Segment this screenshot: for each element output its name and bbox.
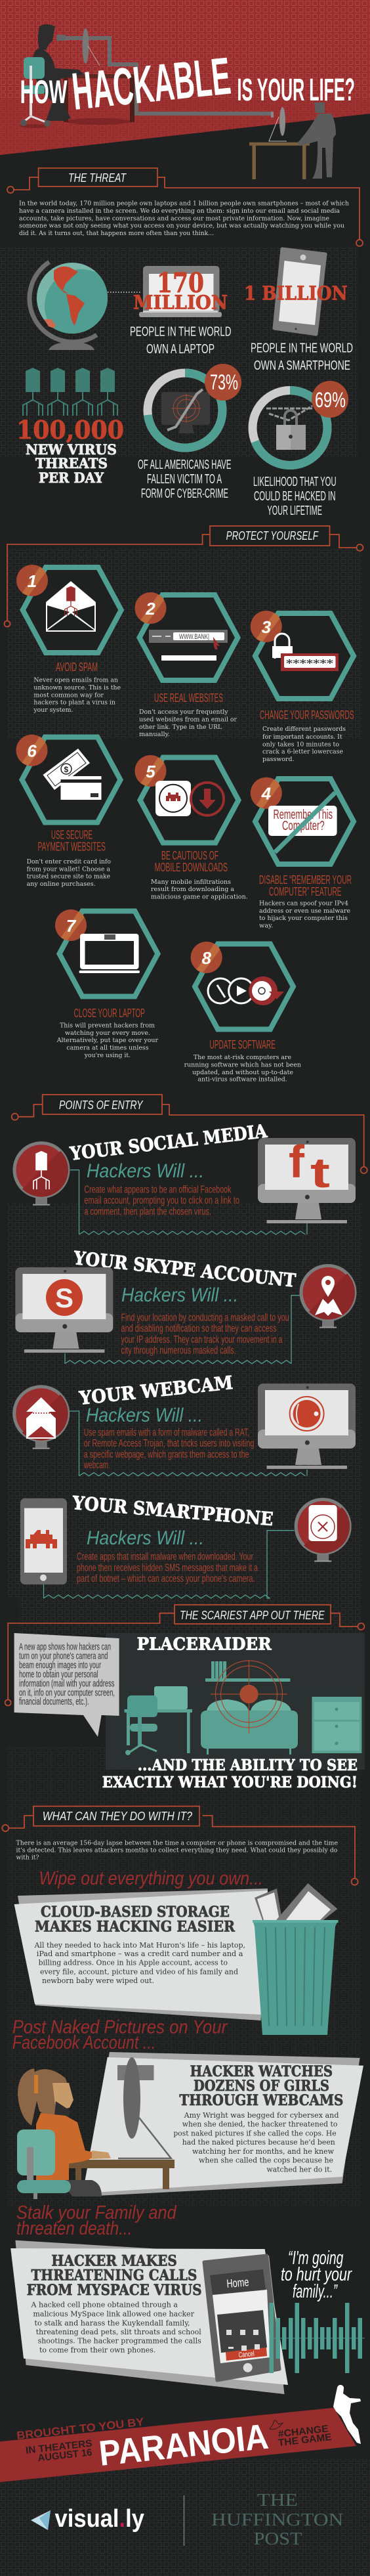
victim figure xyxy=(297,102,336,179)
tip 8: update software: running software which has not been xyxy=(184,1062,301,1069)
tip 5: mobile downloads: MOBILE DOWNLOADS xyxy=(155,861,228,874)
crosshair target xyxy=(211,1660,287,1734)
banner: brought to you by paranoia xyxy=(0,2385,361,2482)
hacker figure xyxy=(31,24,84,121)
hacker chair xyxy=(20,57,51,128)
section heading: points of entry: POINTS OF ENTRY xyxy=(59,1099,144,1112)
icon: location pin circle xyxy=(301,1266,355,1328)
panel: hacker watches dozens of girls: HACKER WATCHES xyxy=(190,2063,333,2080)
stat: 170 million xyxy=(133,267,228,314)
panel: cloud-based storage: MAKES HACKING EASIER xyxy=(35,1919,236,1936)
tip 7: close your laptop: 7 xyxy=(66,916,77,936)
section heading: what can they do with it: WHAT CAN THEY DO WITH IT? xyxy=(43,1810,192,1823)
section heading: protect yourself: PROTECT YOURSELF xyxy=(226,529,319,542)
tip 6: secure payment websites: USE SECURE xyxy=(51,829,92,842)
tip 1: avoid spam: 1 xyxy=(28,571,37,591)
entry: your skype account: your IP address. They can track your movement in a xyxy=(121,1334,283,1345)
heading: stalk your family: threaten death... xyxy=(16,2218,132,2239)
entry: your smartphone: part of botnet – which can access your phone's camera. xyxy=(77,1573,255,1584)
heading: post naked pictures: Facebook Account ... xyxy=(12,2032,155,2053)
entry: your social media: a comment, then plant the chosen virus. xyxy=(84,1206,211,1217)
tip 3: change your passwords xyxy=(251,611,354,763)
icon: phone call screen: Cancel xyxy=(238,2350,255,2359)
panel: hacker makes threatening calls: FROM MYSPACE VIRUS xyxy=(27,2282,202,2299)
tip 7: close your laptop xyxy=(55,909,158,1059)
entry: your skype account: city through numerous masked calls. xyxy=(121,1345,236,1357)
icon: virus envelope circle xyxy=(14,1387,68,1449)
banner: brought to you by paranoia: IN THEATERS xyxy=(25,2438,92,2456)
panel: hacker makes threatening calls xyxy=(10,2240,288,2394)
entry: your webcam: Use spam emails with a form of malware called a RAT, xyxy=(84,1428,249,1439)
title: HOW xyxy=(20,74,68,110)
bookshelf xyxy=(205,1661,290,1682)
tip 4: disable remember your computer: to hijack your computer this xyxy=(259,915,348,922)
entry: your webcam: YOUR WEBCAM xyxy=(77,1372,234,1409)
tip 1: avoid spam: hackers to plant a virus in xyxy=(33,699,115,707)
chart: 69% donut xyxy=(253,381,348,465)
entry: your skype account: Hackers Will ... xyxy=(121,1284,238,1306)
icon: tools play and update circles xyxy=(208,976,284,1005)
stat: 100,000 new virus threats: NEW VIRUS xyxy=(26,441,117,458)
section heading: the threat xyxy=(7,168,363,246)
callout: speech bubble about new app: turn on your phone's camera and xyxy=(19,1651,108,1662)
chart: 73% donut: 73% xyxy=(210,370,238,394)
desk and chair xyxy=(125,1686,192,1755)
heading: and the ability to see xyxy=(102,1757,358,1791)
intro text: accounts, take pictures, have conversations and access our most private information. Now, imagine xyxy=(19,215,329,222)
icon: monitor with skype logo: S xyxy=(55,1282,73,1313)
section heading: the scariest app out there: THE SCARIEST APP OUT THERE xyxy=(180,1609,325,1622)
tip 1: avoid spam xyxy=(16,565,121,714)
tip 5: mobile downloads: malicious game or application. xyxy=(151,894,248,901)
label: people own a smartphone xyxy=(251,341,353,373)
tip 2: use real websites: Don't access your frequently xyxy=(139,709,228,716)
panel: hacker makes threatening calls: to stalk and harass the Kuykendall family, xyxy=(34,2319,190,2327)
intro text: what can they do: There is an average 156-day lapse between the time a computer or phone is compromised and the time xyxy=(16,1839,338,1846)
intro text: what can they do: with it? xyxy=(16,1854,39,1862)
panel: cloud-based storage: billing address. Once in his Apple account, access to xyxy=(39,1959,228,1967)
icon: remember this computer box: Computer? xyxy=(282,819,325,833)
panel: hacker makes threatening calls: threatening dead pets, slit throats and school xyxy=(36,2328,201,2336)
panel: hacker watches dozens of girls: when she called the cops because he xyxy=(199,2156,333,2164)
tip 6: secure payment websites: 6 xyxy=(27,741,37,761)
icon: laptop with taped camera xyxy=(79,934,140,973)
panel: hacker makes threatening calls: HACKER MAKES xyxy=(51,2253,177,2270)
callout: speech bubble about new app: on it, info on your computer screen, xyxy=(19,1687,115,1698)
icon: phone with space invader xyxy=(20,1498,67,1584)
tip 2: use real websites: 2 xyxy=(145,599,155,619)
callout: speech bubble about new app: home to obtain your personal xyxy=(19,1669,98,1680)
chart: 69% donut: 69% xyxy=(315,388,346,412)
victim desk xyxy=(249,142,310,179)
intro text xyxy=(19,200,349,237)
label: of all americans: FALLEN VICTIM TO A xyxy=(147,472,222,487)
panel: hacker makes threatening calls: to come from their own phones. xyxy=(39,2346,155,2354)
panel: hacker makes threatening calls: malicious MySpace link allowed one hacker xyxy=(33,2310,195,2319)
hacker desk xyxy=(59,74,134,125)
header: red banner with two hackers xyxy=(0,0,370,179)
icon: browser address bar xyxy=(149,630,228,661)
tip 1: avoid spam: your system. xyxy=(33,707,73,714)
panel: hacker watches dozens of girls: Amy Wright was begged for cybersex and xyxy=(184,2111,339,2120)
victim monitor xyxy=(269,107,287,141)
tip 1: avoid spam: unknown source. This is the xyxy=(33,684,121,691)
tip 3: change your passwords: for important accounts. It xyxy=(262,733,342,741)
stat: 100,000 new virus threats: THREATS xyxy=(35,455,108,471)
icon: money and credit card xyxy=(43,749,101,800)
icon: bird xyxy=(270,2420,283,2430)
icon: globe xyxy=(30,262,142,350)
panel: cloud-based storage: CLOUD-BASED STORAGE xyxy=(41,1904,230,1921)
stat: 1 billion: 1 BILLION xyxy=(244,282,348,305)
callout: speech bubble about new app: beam enough images into your xyxy=(19,1660,101,1671)
logo: the huffington post: THE xyxy=(257,2490,298,2510)
stat: 170 million: 170 xyxy=(157,267,204,299)
stat: 100,000 new virus threats: 100,000 xyxy=(16,415,124,445)
icon: monitor with social logos: t xyxy=(310,1149,330,1196)
tip 6: secure payment websites: from your wallet! Choose a xyxy=(27,866,110,873)
tip 5: mobile downloads xyxy=(135,755,248,901)
panel: hacker watches dozens of girls: when she denied, the hacker threatened to xyxy=(182,2120,338,2129)
entry: your social media: Hackers Will ... xyxy=(87,1160,204,1182)
section heading: protect yourself xyxy=(4,526,363,626)
panel: hacker watches dozens of girls: THROUGH WEBCAMS xyxy=(179,2092,343,2109)
tip 5: mobile downloads: result from downloading a xyxy=(151,886,234,893)
chart: 73% donut xyxy=(148,364,241,448)
callout: speech bubble about new app xyxy=(14,1633,119,1737)
banner: brought to you by paranoia: PARANOIA xyxy=(97,2417,270,2474)
banner: brought to you by paranoia: AUGUST 16 xyxy=(37,2447,92,2464)
tip 5: mobile downloads: 5 xyxy=(146,762,155,781)
banner: brought to you by paranoia: #CHANGE xyxy=(278,2423,329,2440)
tip 2: use real websites: manually. xyxy=(139,731,170,738)
section heading: the threat: THE THREAT xyxy=(68,171,127,185)
tip 2: use real websites: USE REAL WEBSITES xyxy=(154,691,223,705)
tip 8: update software: updated, and without up-to-date xyxy=(192,1069,293,1076)
icon: running man silhouette xyxy=(333,2385,361,2444)
tip 2: use real websites: used websites from an email or xyxy=(139,716,237,724)
logo: the huffington post xyxy=(211,2490,343,2548)
tip 3: change your passwords: 3 xyxy=(262,617,272,637)
icon: browser address bar: WWW.BANK| xyxy=(179,633,209,641)
panel: cloud-based storage: All they needed to hack into Mat Huron's life – his laptop, xyxy=(34,1941,245,1950)
icon: laptop xyxy=(139,266,222,317)
heading: post naked pictures xyxy=(12,2017,228,2053)
label: people own a laptop xyxy=(130,325,231,357)
entry: your smartphone: Hackers Will ... xyxy=(87,1527,204,1549)
entry: your social media: Create what appears to be an official Facebook xyxy=(84,1185,232,1196)
tip 8: update software: 8 xyxy=(201,948,211,968)
intro text: In the world today, 170 million people own laptops and 1 billion people own smartphones – most of which xyxy=(19,200,349,207)
entry: your social media xyxy=(14,1120,356,1234)
quote: going to hurt your family: family...” xyxy=(293,2281,338,2302)
intro text: have a camera installed in the screen. We do everything on them: sign into our email and social media xyxy=(19,207,340,215)
icon: app with x circle xyxy=(296,1500,350,1561)
tip 8: update software xyxy=(184,942,301,1083)
entry: your webcam: or Remote Access Trojan, that tricks users into visiting xyxy=(84,1438,254,1449)
quote: going to hurt your family: “I'm going xyxy=(288,2248,343,2269)
heading: wipe out everything: Wipe out everything you own... xyxy=(39,1868,263,1889)
section heading: what can they do with it xyxy=(2,1806,358,1885)
tip 1: avoid spam: AVOID SPAM xyxy=(56,661,98,674)
callout: speech bubble about new app: financial documents, etc.). xyxy=(19,1696,89,1707)
quote: going to hurt your family xyxy=(281,2248,352,2302)
entry: your webcam: webcam. xyxy=(83,1460,110,1471)
stat: 170 million: MILLION xyxy=(133,292,228,314)
label: people own a laptop: OWN A LAPTOP xyxy=(146,342,215,357)
entry: your skype account xyxy=(15,1247,355,1364)
icon: envelope with virus xyxy=(46,581,96,632)
icon: money and credit card: $ xyxy=(64,765,68,774)
entry: your social media: YOUR SOCIAL MEDIA xyxy=(68,1120,269,1165)
panel: hacker watches dozens of girls: watched her do it. xyxy=(266,2165,332,2173)
panel: hacker watches dozens of girls: watching her for months, and he knew xyxy=(192,2147,335,2156)
icon: padlock and password field: ******* xyxy=(286,657,333,669)
heading: post naked pictures: Post Naked Pictures on Your xyxy=(12,2017,228,2038)
entry: your smartphone: YOUR SMARTPHONE xyxy=(71,1492,274,1530)
tip 4: disable remember your computer: address or even use malware xyxy=(259,907,350,915)
panel: cloud-based storage: every file, account, picture and video of his family and xyxy=(40,1968,238,1976)
panel: hacker makes threatening calls: THREATENING CALLS xyxy=(31,2267,197,2284)
panel: placeraider bedroom xyxy=(106,1633,365,1770)
callout: speech bubble about new app: information (mail with your address xyxy=(19,1678,114,1689)
tip 8: update software: The most at-risk computers are xyxy=(194,1054,291,1061)
banner: brought to you by paranoia: THE GAME xyxy=(278,2432,332,2449)
tip 4: disable remember your computer: way. xyxy=(259,923,273,930)
entry: your skype account: Find your location by conducting a masked call to you xyxy=(121,1313,289,1324)
label: likelihood xyxy=(253,475,337,518)
panel: hacker makes threatening calls: A hacked cell phone obtained through a xyxy=(30,2301,178,2309)
tip 2: use real websites xyxy=(135,592,237,738)
intro text: what can they do: it's detected. This leaves attackers months to collect everything they need. What could they possibly do xyxy=(16,1847,338,1854)
label: of all americans: FORM OF CYBER-CRIME xyxy=(141,487,228,501)
chart: sound wave xyxy=(269,2303,365,2373)
panel: hacker watches dozens of girls: DOZENS OF GIRLS xyxy=(194,2078,329,2095)
entry: your skype account: and disabling notification so that they can access xyxy=(121,1323,277,1334)
tip 6: secure payment websites xyxy=(16,735,121,888)
label: of all americans: OF ALL AMERICANS HAVE xyxy=(138,458,231,472)
panel: hacker makes threatening calls: shootings. The hacker programmed the calls xyxy=(38,2337,201,2346)
tip 4: disable remember your computer: Hackers can spoof your IPv4 xyxy=(259,900,348,907)
icon: phone call screen: Home xyxy=(226,2275,249,2290)
entry: your social media: email account, prompting you to click on a link to xyxy=(84,1195,239,1206)
logo: the huffington post: HUFFINGTON xyxy=(211,2510,343,2529)
entry: your webcam xyxy=(14,1372,356,1476)
icon: app with download arrow xyxy=(155,781,224,816)
panel: hacker watches dozens of girls: post naked pictures if she called the cops. He xyxy=(173,2129,337,2137)
icon: trash can with devices xyxy=(253,1883,339,2035)
panel: cloud-based storage xyxy=(14,1883,338,2035)
panel: cloud-based storage: newborn baby were wiped out. xyxy=(42,1976,154,1985)
heading: stalk your family: Stalk your Family and xyxy=(16,2202,176,2223)
icon: monitor with social logos xyxy=(258,1136,356,1223)
tip 6: secure payment websites: PAYMENT WEBSITES xyxy=(38,840,106,854)
panel: placeraider bedroom: PLACERAIDER xyxy=(137,1635,272,1655)
banner: brought to you by paranoia: BROUGHT TO YOU BY xyxy=(16,2416,145,2442)
icon: monitor with social logos: f xyxy=(289,1136,305,1187)
tip 7: close your laptop: Alternatively, put tape over your xyxy=(56,1037,158,1044)
label: people own a laptop: PEOPLE IN THE WORLD xyxy=(130,325,231,339)
icon: smartphone xyxy=(274,249,325,334)
icon: monitor with skype logo xyxy=(15,1267,113,1353)
tip 6: secure payment websites: any online purchases. xyxy=(27,881,96,888)
logo: visual.ly: visual.ly xyxy=(55,2505,144,2533)
entry: your skype account: YOUR SKYPE ACCOUNT xyxy=(72,1247,297,1292)
tip 5: mobile downloads: BE CAUTIOUS OF xyxy=(161,849,218,862)
dresser xyxy=(312,1697,361,1753)
bed xyxy=(201,1699,298,1755)
tip 3: change your passwords: only takes 10 minutes to xyxy=(262,741,339,749)
illustration: woman at desk xyxy=(17,2068,175,2199)
label: of all americans xyxy=(138,458,231,501)
title: HACKABLE xyxy=(70,47,233,121)
icon: monitor with webcam lens xyxy=(258,1384,356,1469)
section heading: the scariest app out there xyxy=(5,1605,364,1706)
tip 1: avoid spam: most common way for xyxy=(33,691,104,699)
tip 4: disable remember your computer xyxy=(251,777,354,930)
tip 3: change your passwords: Create different passwords xyxy=(262,726,346,733)
intro text: did it. As it turns out, that happens more often than you think... xyxy=(19,230,214,237)
hacker pipe periscope xyxy=(56,28,272,114)
icon: webcam monitor side view xyxy=(117,2057,171,2158)
stat: 100,000 new virus threats: PER DAY xyxy=(39,469,104,486)
entry: your webcam: a specific webpage, which grants them access to the xyxy=(84,1449,249,1460)
entry: your smartphone: phone then receives hidden SMS messages that make it a xyxy=(77,1562,258,1573)
icon: four viruses xyxy=(23,368,117,416)
tip 8: update software: UPDATE SOFTWARE xyxy=(209,1038,276,1051)
tip 2: use real websites: other link. Type in the URL xyxy=(139,724,222,731)
panel: hacker watches dozens of girls: had the naked pictures because he'd been xyxy=(182,2138,335,2147)
icon: phone call screen xyxy=(204,2256,279,2380)
icon: padlock and password field xyxy=(272,634,339,671)
section heading: points of entry xyxy=(12,1095,367,1173)
icon: remember this computer box: Remember This xyxy=(273,808,333,822)
tip 8: update software: anti-virus software installed. xyxy=(197,1076,287,1083)
tip 7: close your laptop: This will prevent hackers from xyxy=(60,1022,155,1030)
tip 7: close your laptop: watching your every move. xyxy=(65,1030,150,1037)
icon: remember this computer box xyxy=(268,793,337,852)
panel: hacker watches dozens of girls xyxy=(17,2052,363,2199)
tip 1: avoid spam: Never open emails from an xyxy=(33,677,118,684)
intro text: what can they do xyxy=(16,1839,338,1862)
heading: stalk your family xyxy=(16,2202,176,2239)
tip 7: close your laptop: you're using it. xyxy=(84,1052,131,1059)
callout: speech bubble about new app: A new app shows how hackers can xyxy=(19,1642,111,1653)
entry: your webcam: Hackers Will ... xyxy=(86,1405,203,1426)
tip 7: close your laptop: camera at all times unless xyxy=(66,1045,149,1052)
tip 3: change your passwords: crack a 6-letter lowercase xyxy=(262,749,343,756)
label: likelihood: YOUR LIFETIME xyxy=(268,504,322,518)
entry: your smartphone xyxy=(20,1492,350,1598)
tip 7: close your laptop: CLOSE YOUR LAPTOP xyxy=(74,1007,145,1020)
stat: 100,000 new virus threats xyxy=(16,415,124,486)
tip 6: secure payment websites: trusted secure site to make xyxy=(27,873,110,881)
tip 4: disable remember your computer: 4 xyxy=(261,784,272,804)
tip 5: mobile downloads: Many mobile infiltrations xyxy=(151,879,231,886)
panel: cloud-based storage: iPad and smartphone – was a credit card number and a xyxy=(37,1950,243,1958)
entry: your smartphone: Create apps that install malware when downloaded. Your xyxy=(77,1552,253,1563)
tip 3: change your passwords: password. xyxy=(262,756,295,763)
logo: the huffington post: POST xyxy=(254,2529,302,2548)
intro text: someone was not only seeing what you access on your device, but was actually watching you while you xyxy=(19,223,344,230)
tip 6: secure payment websites: Don't enter credit card info xyxy=(27,858,111,865)
